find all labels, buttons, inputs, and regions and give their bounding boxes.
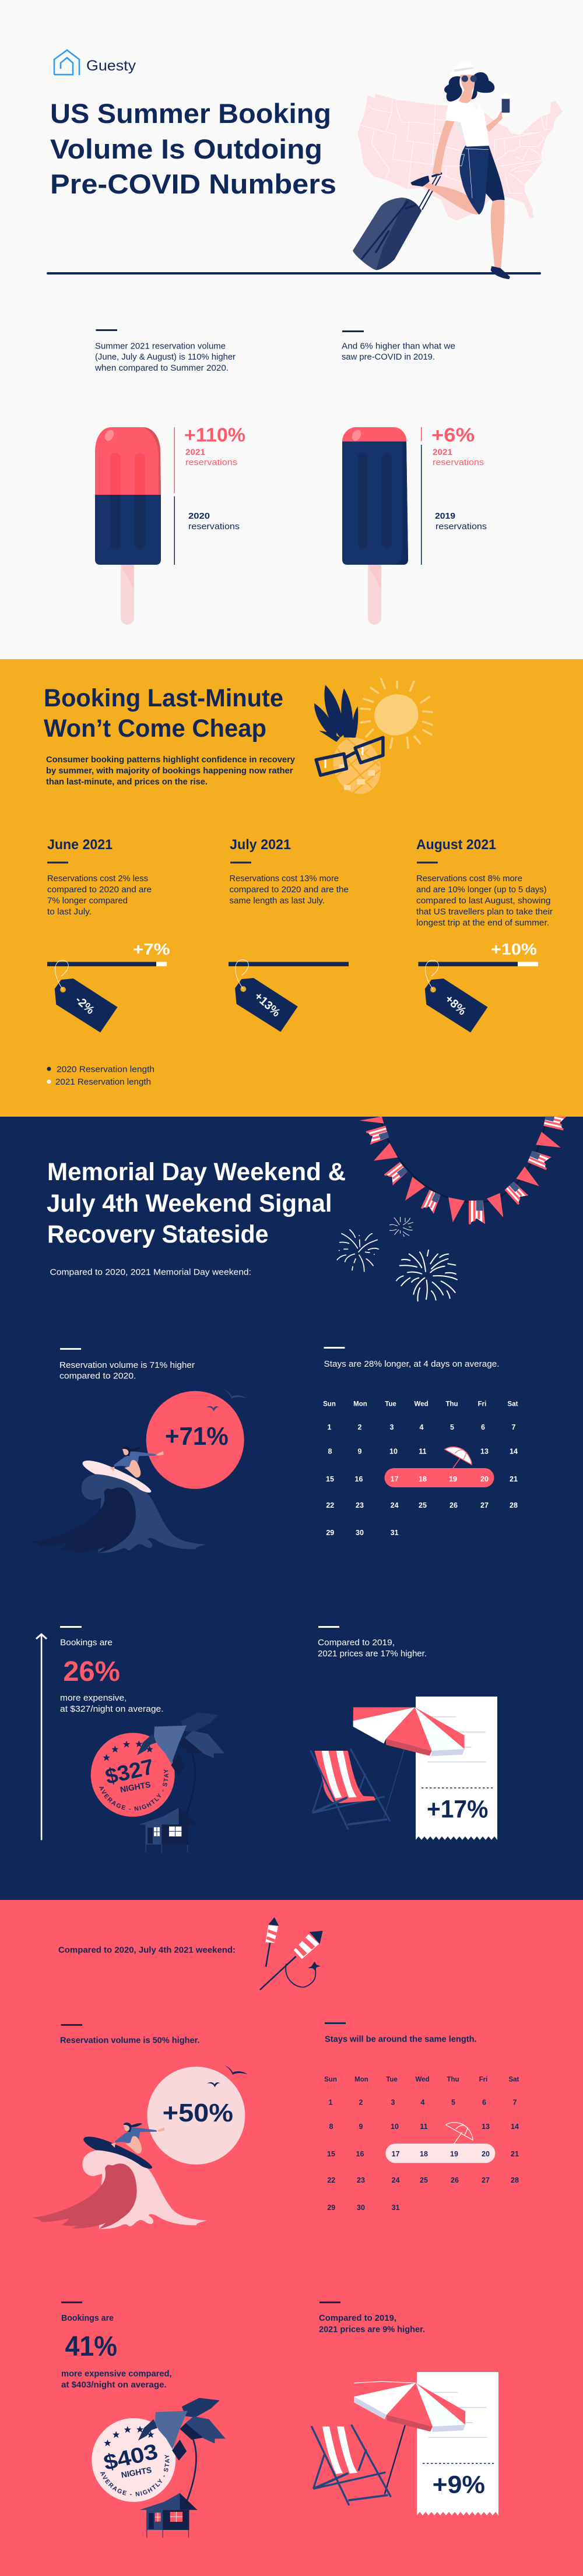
calendar: Memorial Day weekend — [323, 1400, 518, 1537]
text: bookings 41%: at $403/night on average. — [61, 2380, 167, 2390]
calendar: Memorial Day weekend: Tue — [385, 1400, 396, 1407]
column: August 2021: longest trip at the end of summer. — [416, 918, 549, 928]
text: 2021 prices 9% higher — [319, 2301, 425, 2334]
calendar: Memorial Day weekend: 20 — [480, 1475, 489, 1483]
calendar: Memorial Day weekend: Wed — [415, 1400, 429, 1407]
calendar: Memorial Day weekend: 23 — [356, 1501, 364, 1509]
calendar: Memorial Day weekend: 27 — [480, 1501, 489, 1509]
calendar: July 4th weekend: Wed — [415, 2076, 430, 2083]
popsicle chart: +110% — [95, 424, 245, 625]
calendar: July 4th weekend: 11 — [420, 2123, 428, 2131]
calendar: July 4th weekend: 30 — [357, 2204, 365, 2212]
intro paragraph: than last-minute, and prices on the rise. — [46, 777, 208, 787]
fireworks — [337, 1217, 457, 1301]
column: June 2021: Reservations cost 2% less — [47, 874, 148, 884]
illustration: surfer with +50%: +50% — [163, 2099, 233, 2127]
calendar: July 4th weekend: Fri — [479, 2076, 487, 2083]
column: August 2021: +10% — [491, 940, 537, 958]
calendar: July 4th weekend: 9 — [359, 2123, 363, 2131]
column: August 2021: that US travellers plan to take their — [416, 907, 553, 917]
text: reservation volume 50%: Reservation volume is 50% higher. — [60, 2036, 199, 2046]
calendar: July 4th weekend: 24 — [392, 2176, 400, 2184]
column: July 2021: compared to 2020 and are the — [230, 885, 349, 895]
traveller with suitcase — [353, 62, 511, 279]
calendar: July 4th weekend: Sat — [508, 2076, 519, 2083]
calendar: July 4th weekend — [324, 2076, 519, 2212]
calendar: Memorial Day weekend: Fri — [478, 1400, 486, 1407]
text: stays same length — [325, 2022, 477, 2044]
calendar: July 4th weekend: 20 — [482, 2150, 490, 2158]
beach chair and umbrella — [311, 1707, 465, 1829]
badge and palm: $403: NIGHTS — [120, 2465, 152, 2480]
calendar: Memorial Day weekend: Mon — [353, 1400, 367, 1407]
heading: Booking Last-Minute: Won’t Come Cheap — [44, 715, 266, 742]
text: bookings 41%: 41% — [65, 2331, 117, 2362]
text: reservation volume 71%: compared to 2020. — [59, 1371, 136, 1381]
popsicle chart: +6%: +6% — [431, 424, 475, 445]
ground line — [47, 272, 541, 275]
column: July 2021: July 2021 — [230, 837, 291, 853]
calendar: July 4th weekend: 22 — [327, 2176, 335, 2184]
calendar: July 4th weekend: 10 — [391, 2123, 399, 2131]
text: summer vs 2020: when compared to Summer 2020. — [94, 363, 229, 373]
beach chair and umbrella: coral — [311, 2381, 465, 2505]
text: bookings 26%: at $327/night on average. — [60, 1704, 164, 1714]
column: June 2021: 7% longer compared — [47, 896, 128, 906]
legend: 2020 Reservation length — [57, 1064, 154, 1074]
calendar: Memorial Day weekend: 5 — [450, 1423, 454, 1431]
text: reservation volume 71% — [59, 1348, 195, 1381]
calendar: Memorial Day weekend: 31 — [391, 1529, 399, 1537]
calendar: Memorial Day weekend: 17 — [391, 1475, 399, 1483]
calendar: Memorial Day weekend: 30 — [356, 1529, 364, 1537]
calendar: July 4th weekend: 23 — [357, 2176, 365, 2184]
text: summer vs 2020: (June, July & August) is 110% higher — [95, 352, 236, 362]
popsicle chart: +6%: 2021 — [433, 448, 452, 457]
calendar: Memorial Day weekend: 21 — [510, 1475, 518, 1483]
calendar: Memorial Day weekend: 15 — [326, 1475, 334, 1483]
calendar: July 4th weekend: 5 — [451, 2098, 455, 2106]
text: summer vs 2019 — [342, 330, 455, 362]
column: June 2021: compared to 2020 and are — [47, 885, 152, 895]
column: June 2021: -2% — [73, 994, 97, 1017]
calendar: July 4th weekend: 31 — [392, 2204, 400, 2212]
arrow: price up — [36, 1634, 47, 1840]
column: August 2021: August 2021 — [416, 837, 496, 853]
icon: sun — [361, 679, 432, 748]
column: August 2021: and are 10% longer (up to 5 days) — [416, 885, 547, 895]
calendar: July 4th weekend: 18 — [420, 2150, 428, 2158]
bunting of flags — [360, 1112, 566, 1224]
calendar: July 4th weekend: Mon — [354, 2076, 368, 2083]
column: June 2021: +7% — [133, 940, 170, 958]
calendar: July 4th weekend: 4 — [421, 2098, 425, 2106]
column: July 2021 — [229, 837, 349, 1032]
calendar: July 4th weekend: 1 — [329, 2098, 333, 2106]
calendar: July 4th weekend: 17 — [392, 2150, 400, 2158]
calendar: Memorial Day weekend: 8 — [328, 1448, 332, 1456]
heading: Memorial Day: Recovery Stateside — [47, 1220, 268, 1248]
heading: Memorial Day: Memorial Day Weekend & — [47, 1158, 346, 1186]
text: summer vs 2020 — [94, 329, 236, 373]
calendar: July 4th weekend: 19 — [450, 2150, 458, 2158]
icon: pineapple with glasses — [314, 685, 385, 796]
calendar: July 4th weekend: 14 — [511, 2123, 519, 2131]
badge and palm: $403 — [92, 2398, 226, 2538]
illustration: surfer with +71% — [31, 1389, 247, 1553]
calendar: July 4th weekend: Sun — [324, 2076, 337, 2083]
text: bookings 41%: Bookings are — [61, 2313, 114, 2323]
logo: Guesty — [54, 50, 136, 75]
calendar: July 4th weekend: 27 — [482, 2176, 490, 2184]
calendar: July 4th weekend: Tue — [386, 2076, 398, 2083]
text: bookings 41% — [61, 2301, 172, 2390]
badge and palm: $327 — [91, 1712, 224, 1852]
receipt: +9%: +9% — [433, 2471, 485, 2499]
icon: calendar umbrella — [445, 1447, 472, 1468]
popsicle chart: +6%: 2019 — [435, 511, 455, 521]
title: Pre-COVID Numbers — [50, 168, 336, 199]
badge and palm: $327: AVERAGE - NIGHTLY - STAY — [99, 1769, 168, 1811]
text: bookings 41%: more expensive compared, — [61, 2369, 172, 2379]
map of the United States — [357, 94, 563, 220]
column: July 2021: same length as last July. — [230, 896, 325, 906]
column: July 2021: Reservations cost 13% more — [230, 874, 339, 884]
text: bookings 26% — [60, 1626, 164, 1714]
calendar: July 4th weekend: 21 — [511, 2150, 519, 2158]
text: stays same length: Stays will be around the same length. — [325, 2035, 477, 2044]
calendar: Memorial Day weekend: 2 — [358, 1423, 362, 1431]
legend — [47, 1064, 154, 1087]
popsicle chart: +6%: reservations — [433, 458, 484, 467]
calendar: Memorial Day weekend: 4 — [420, 1423, 424, 1431]
column: June 2021: June 2021 — [47, 837, 113, 853]
calendar: July 4th weekend: 6 — [482, 2098, 486, 2106]
badge and palm: $327: $327 — [103, 1754, 156, 1789]
title — [50, 98, 336, 199]
text: stays 28% longer: Stays are 28% longer, at 4 days on average. — [324, 1359, 499, 1369]
calendar: July 4th weekend: 29 — [327, 2204, 335, 2212]
popsicle chart: +6%: reservations — [436, 522, 487, 532]
logo: Guesty: Guesty — [86, 58, 136, 74]
text: stays 28% longer — [324, 1347, 499, 1369]
column: June 2021 — [47, 837, 170, 1033]
intro paragraph: by summer, with majority of bookings happening now rather — [46, 766, 293, 776]
calendar: July 4th weekend: 3 — [391, 2098, 395, 2106]
calendar: Memorial Day weekend: Thu — [445, 1400, 458, 1407]
text: 2021 prices 9% higher: Compared to 2019, — [319, 2313, 396, 2323]
heading: Booking Last-Minute — [44, 684, 283, 742]
calendar: Memorial Day weekend: 10 — [389, 1448, 398, 1456]
popsicle chart: +110%: reservations — [185, 458, 237, 467]
calendar: Memorial Day weekend: 19 — [449, 1475, 457, 1483]
receipt: +17% — [416, 1697, 497, 1840]
calendar: July 4th weekend: 25 — [420, 2176, 428, 2184]
heading: Memorial Day — [47, 1158, 346, 1248]
text: 2021 prices 17% higher: 2021 prices are 17% higher. — [318, 1649, 427, 1659]
text: summer vs 2020: Summer 2021 reservation volume — [95, 342, 226, 351]
calendar: Memorial Day weekend: 18 — [419, 1475, 427, 1483]
badge and palm: $327: NIGHTS — [120, 1780, 152, 1794]
heading: Booking Last-Minute: Booking Last-Minute — [44, 684, 283, 712]
calendar: July 4th weekend: 15 — [327, 2150, 335, 2158]
calendar: Memorial Day weekend: Sun — [323, 1400, 336, 1407]
text: reservation volume 71%: Reservation volume is 71% higher — [59, 1360, 195, 1370]
calendar: July 4th weekend: 2 — [359, 2098, 363, 2106]
popsicle chart: +110%: 2021 — [185, 448, 205, 457]
legend: 2021 Reservation length — [55, 1077, 151, 1087]
calendar: Memorial Day weekend: 16 — [355, 1475, 363, 1483]
icon: rockets — [260, 1917, 323, 1990]
column: July 2021: +13% — [252, 990, 283, 1019]
text: summer vs 2019: saw pre-COVID in 2019. — [342, 352, 435, 362]
heading: Memorial Day: July 4th Weekend Signal — [47, 1190, 332, 1217]
calendar: Memorial Day weekend: Sat — [508, 1400, 518, 1407]
calendar: July 4th weekend: 16 — [356, 2150, 364, 2158]
column: August 2021: Reservations cost 8% more — [416, 874, 522, 884]
column: August 2021: +8% — [442, 993, 469, 1018]
title: Volume Is Outdoing — [50, 133, 322, 164]
popsicle chart: +110%: 2020 — [188, 511, 210, 521]
text: bookings 26%: Bookings are — [60, 1638, 113, 1648]
text: 2021 prices 17% higher — [318, 1626, 427, 1659]
calendar: Memorial Day weekend: 14 — [510, 1448, 518, 1456]
calendar: Memorial Day weekend: 28 — [510, 1501, 518, 1509]
illustration: surfer with +50% — [32, 2065, 248, 2229]
calendar: Memorial Day weekend: 9 — [358, 1448, 362, 1456]
receipt: +9% — [417, 2372, 498, 2515]
text: summer vs 2019: And 6% higher than what we — [342, 342, 455, 351]
calendar: July 4th weekend: Thu — [447, 2076, 459, 2083]
subheading: Memorial Day weekend: Compared to 2020, 2021 Memorial Day weekend: — [50, 1268, 251, 1278]
calendar: Memorial Day weekend: 25 — [419, 1501, 427, 1509]
badge and palm: $403: $403 — [101, 2439, 160, 2475]
calendar: Memorial Day weekend: 22 — [326, 1501, 334, 1509]
calendar: Memorial Day weekend: 24 — [391, 1501, 399, 1509]
illustration: surfer with +71%: +71% — [165, 1422, 229, 1451]
calendar: Memorial Day weekend: 3 — [390, 1423, 394, 1431]
column: June 2021: to last July. — [47, 907, 92, 917]
text: bookings 26%: 26% — [63, 1656, 120, 1687]
column: August 2021 — [416, 837, 553, 1033]
popsicle chart: +6% — [342, 424, 487, 625]
calendar: July 4th weekend: 26 — [451, 2176, 459, 2184]
calendar: July 4th weekend: 13 — [482, 2123, 490, 2131]
calendar: July 4th weekend: 7 — [513, 2098, 517, 2106]
popsicle chart: +110%: +110% — [184, 424, 245, 445]
text: 2021 prices 17% higher: Compared to 2019, — [318, 1638, 395, 1648]
calendar: Memorial Day weekend: 1 — [328, 1423, 332, 1431]
text: 2021 prices 9% higher: 2021 prices are 9% higher. — [319, 2324, 425, 2334]
text: bookings 26%: more expensive, — [60, 1693, 127, 1703]
badge and palm: $403: AVERAGE - NIGHTLY - STAY — [100, 2455, 169, 2497]
subheading: July 4th weekend: Compared to 2020, July 4th 2021 weekend: — [58, 1945, 236, 1955]
calendar: Memorial Day weekend: 26 — [449, 1501, 458, 1509]
calendar: Memorial Day weekend: 13 — [480, 1448, 489, 1456]
intro paragraph: Consumer booking patterns highlight confidence in recovery — [46, 755, 295, 765]
calendar: Memorial Day weekend: 7 — [512, 1423, 516, 1431]
calendar: Memorial Day weekend: 11 — [419, 1448, 427, 1456]
title: US Summer Booking — [50, 98, 331, 129]
calendar: Memorial Day weekend: 29 — [326, 1529, 334, 1537]
column: August 2021: compared to last August, showing — [416, 896, 550, 906]
text: reservation volume 50% — [60, 2024, 199, 2046]
popsicle chart: +110%: reservations — [188, 522, 240, 532]
icon: calendar umbrella outline — [446, 2123, 473, 2144]
calendar: July 4th weekend: 8 — [329, 2123, 333, 2131]
intro paragraph — [46, 755, 295, 787]
calendar: Memorial Day weekend: 6 — [481, 1423, 485, 1431]
calendar: July 4th weekend: 28 — [511, 2176, 519, 2184]
receipt: +17%: +17% — [427, 1795, 488, 1823]
